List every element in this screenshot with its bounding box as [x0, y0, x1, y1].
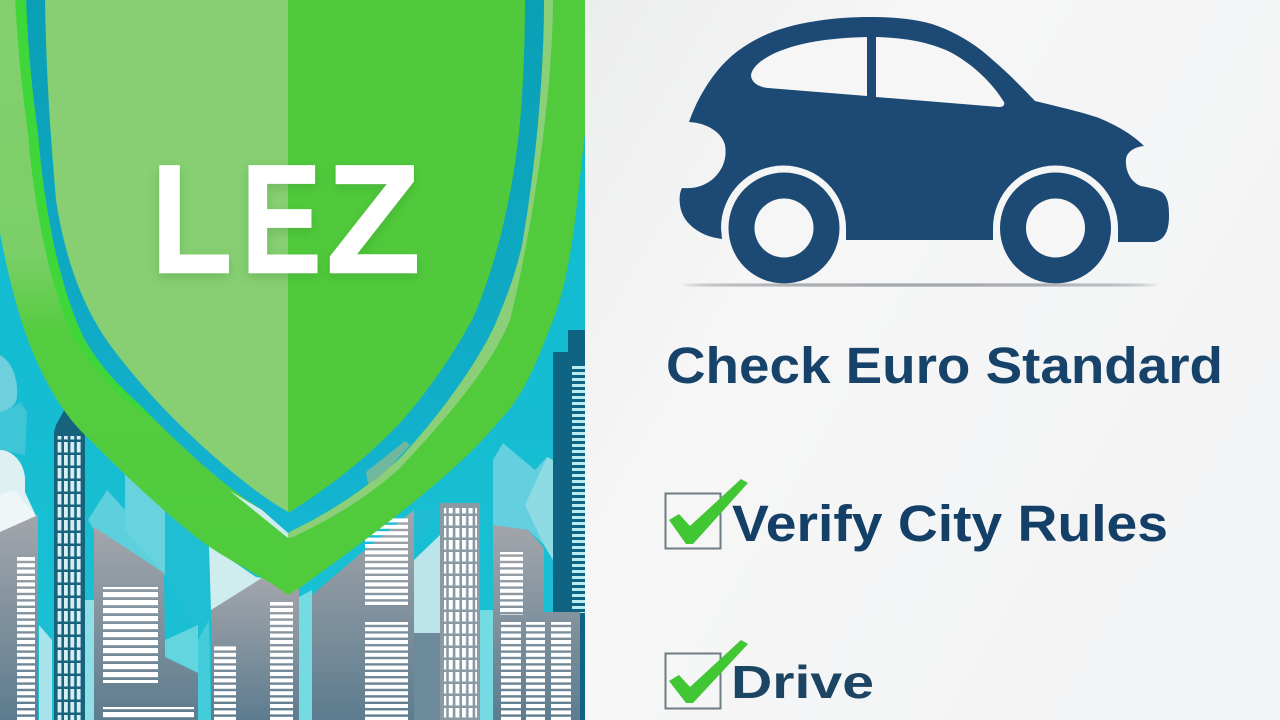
car front wheel: [1000, 172, 1111, 284]
shield outer band left: [0, 0, 288, 595]
label: Verify City Rules: Verify City Rules: [732, 495, 1168, 552]
left panel: city and shield: [0, 0, 585, 720]
checkbox 1: [666, 494, 720, 548]
title: LEZ: [151, 132, 421, 306]
label: Drive: Drive: [731, 656, 874, 708]
building A: [0, 515, 38, 720]
checkmark 2: [669, 640, 748, 703]
tower B: [54, 403, 85, 720]
building D: [211, 578, 299, 720]
title: LEZ: L: [151, 132, 232, 306]
title: LEZ: Z: [326, 132, 421, 306]
shield left half: [45, 0, 288, 512]
car front window: [876, 37, 1004, 107]
shield gap cloud wedge: [230, 491, 288, 538]
sky: pale clouds and light shapes: [0, 355, 553, 720]
checkmark 1: [669, 479, 748, 544]
shield right half: [288, 0, 525, 512]
car rear window: [751, 37, 867, 96]
shield pale inner line right: [288, 0, 553, 538]
icon: car: [680, 17, 1169, 286]
checklist item: Verify City Rules: [666, 479, 1168, 552]
shield: [0, 0, 585, 595]
building E: [312, 510, 414, 720]
title: LEZ: E: [241, 133, 322, 306]
heading: Check Euro Standard: Check Euro Standard: [666, 337, 1223, 394]
right panel background: [585, 0, 1280, 720]
car ground shadow: [682, 284, 1158, 286]
tower G: [440, 503, 480, 720]
car rear wheel: [728, 172, 840, 284]
building H: [493, 525, 580, 720]
car body: [680, 17, 1169, 242]
building C: [94, 527, 198, 720]
sky background: [0, 0, 585, 720]
dark tower I: [553, 330, 585, 720]
shield smudge: [366, 441, 410, 484]
shield outer band right: [288, 0, 585, 595]
building F: [414, 633, 441, 720]
checklist item: Drive: [666, 640, 874, 708]
shield bright inner line left: [15, 0, 165, 428]
checkbox 2: [666, 654, 720, 708]
shield teal ring: [26, 0, 544, 533]
